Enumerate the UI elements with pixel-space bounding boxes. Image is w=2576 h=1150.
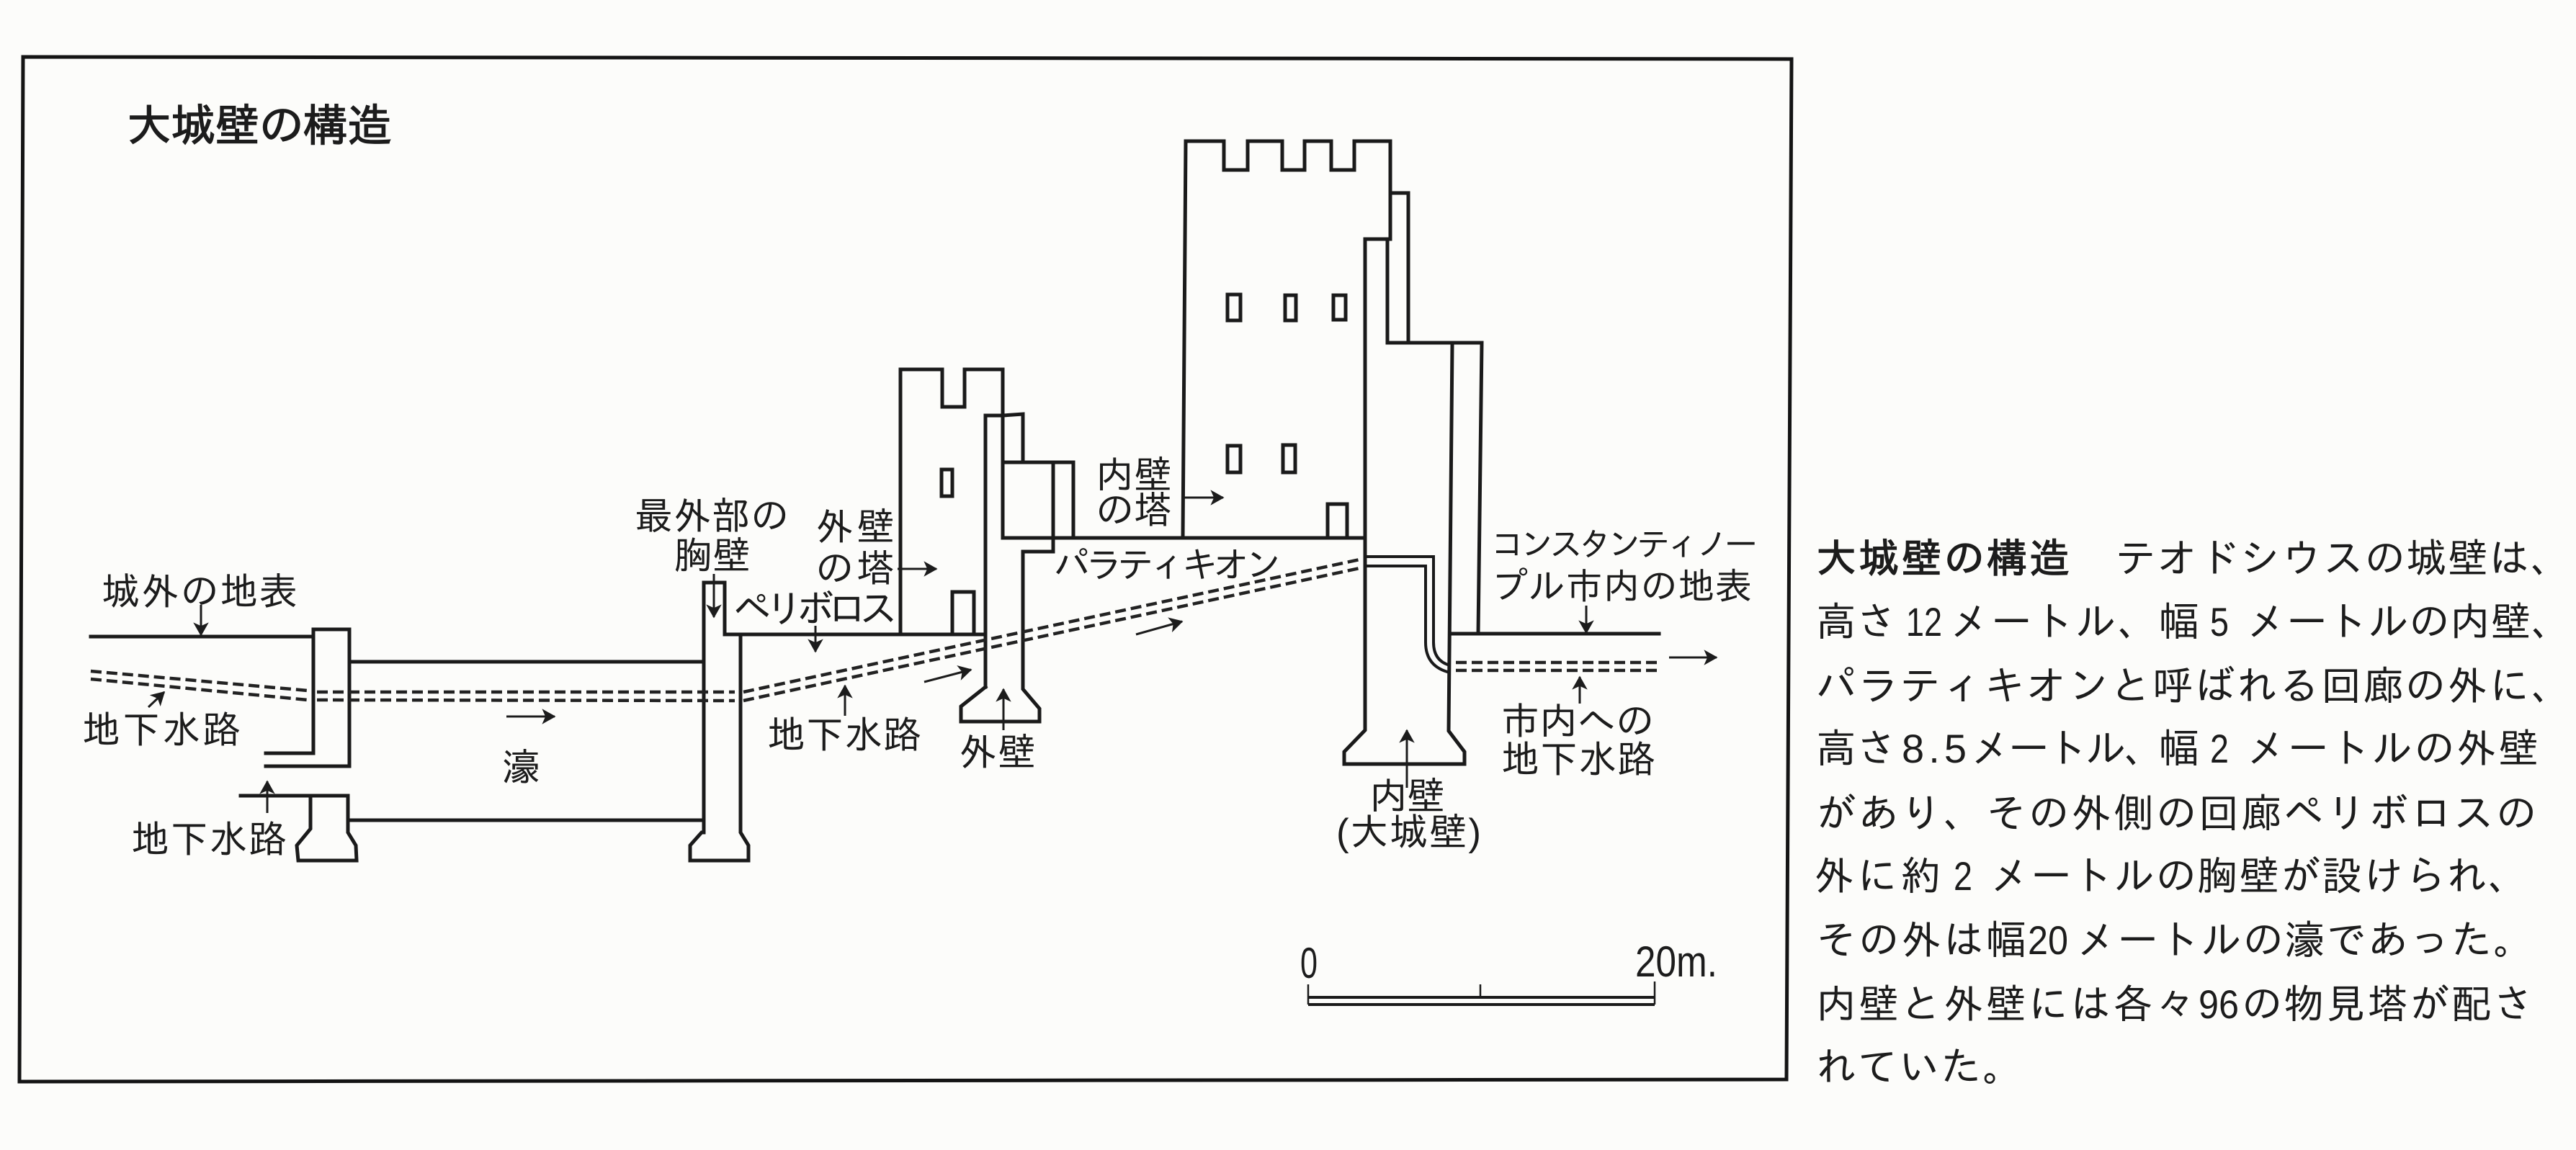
- arrow: conduit exit: [1669, 657, 1717, 658]
- arrow: lower conduit: [267, 781, 268, 813]
- label: inner tower line 1: 内壁: [1096, 454, 1172, 497]
- arrow: outer tower: [898, 567, 936, 570]
- label: outer tower line 2: の塔: [815, 548, 895, 590]
- inner tower windows: [1227, 295, 1346, 472]
- label: city conduit line 2: 地下水路: [1501, 739, 1655, 781]
- label: moat: 濠: [502, 747, 540, 789]
- line 4: [1816, 726, 2539, 771]
- outer tower: [900, 369, 1003, 634]
- line 4: 幅: [2159, 726, 2199, 771]
- label: constantinople line 1: コンスタンティノー: [1491, 526, 1758, 563]
- scale label zero: 0: [1300, 939, 1318, 987]
- outer wall block: [1003, 462, 1073, 538]
- outermost parapet wall: [690, 583, 748, 861]
- outer tower door: [952, 592, 974, 634]
- label: constantinople line 2: プル市内の地表: [1491, 566, 1752, 607]
- outside ground surface: [91, 635, 313, 638]
- panel: diagram frame: [19, 57, 1792, 1082]
- arrow: middle conduit: [844, 686, 846, 716]
- arrow: inner wall: [1406, 730, 1408, 788]
- label: outermost parapet: 最外部の: [635, 495, 789, 538]
- counterscarp wall footing: [241, 796, 357, 861]
- inner tower door: [1328, 504, 1347, 537]
- label: inner wall: 内壁: [1369, 776, 1445, 818]
- arrow: conduit left: [148, 692, 164, 707]
- arrow: city ground: [1585, 606, 1588, 633]
- line 4: 8.5: [1902, 726, 1967, 771]
- periboros ground: [725, 632, 985, 637]
- bold lead-in: 大城壁の構造: [1816, 536, 2070, 581]
- counterscarp wall upper: [266, 629, 349, 766]
- arrow: periboros: [814, 626, 817, 652]
- arrow: moat flow: [506, 716, 555, 717]
- line 8: 96: [2199, 981, 2239, 1027]
- dashed water conduit under moat: [317, 692, 735, 701]
- line 4: メートルの外壁: [2246, 726, 2539, 771]
- line 3: パラティキオンと呼ばれる回廊の外に、: [1816, 663, 2572, 709]
- inner tower: [1183, 141, 1390, 538]
- moat lower line: [349, 818, 702, 822]
- arrow: flow 2: [1136, 621, 1182, 634]
- line 6: 外に約: [1814, 853, 1941, 899]
- dashed water conduit rising: [743, 559, 1363, 701]
- label: periboros: ペリボロス: [733, 588, 898, 631]
- label: great wall: (大城壁): [1336, 812, 1481, 854]
- arrow: city conduit: [1579, 677, 1580, 704]
- label: parapet line 2: 胸壁: [674, 535, 751, 578]
- label: outer wall: 外壁: [959, 732, 1036, 774]
- line 4: 高さ: [1816, 726, 1897, 771]
- line 2: 5: [2210, 599, 2229, 644]
- diagram: wall cross-section: [91, 141, 1659, 861]
- inner wall: [1344, 239, 1464, 764]
- line 9: れていた。: [1816, 1044, 2023, 1090]
- city ground surface: [1452, 632, 1659, 635]
- line 1: テオドシウスの城壁は、: [2116, 536, 2571, 581]
- line 7: [1816, 917, 2533, 963]
- dashed water conduit city: [1456, 662, 1659, 670]
- dashed water conduit outside: [91, 671, 308, 700]
- line 2: 高さ: [1816, 599, 1897, 644]
- arrow: flow 1: [924, 670, 971, 682]
- text block: description: [1814, 536, 2572, 1090]
- line 8: の物見塔が配さ: [2242, 981, 2533, 1027]
- label: inner tower line 2: の塔: [1096, 490, 1172, 532]
- scale bar: [1300, 938, 1717, 1005]
- scale label twenty metres: 20m.: [1635, 938, 1717, 986]
- line 2: [1816, 599, 2572, 644]
- label: conduit middle: 地下水路: [767, 714, 921, 757]
- line 2: メートルの内壁、: [2246, 599, 2572, 644]
- arrow: outer wall: [1003, 689, 1004, 730]
- line 7: メートルの濠であった。: [2076, 917, 2533, 963]
- line 5: があり、その外側の回廊ペリボロスの: [1816, 791, 2536, 836]
- moat upper line: [349, 660, 702, 664]
- title: 大城壁の構造: [127, 102, 392, 151]
- label: conduit lower: 地下水路: [131, 819, 287, 861]
- inner wall upper step: [1387, 193, 1482, 634]
- outer wall: [961, 414, 1053, 722]
- label: city conduit line 1: 市内への: [1501, 701, 1654, 743]
- line 2: 幅: [2159, 599, 2199, 644]
- line 4: メートル、: [1970, 726, 2165, 771]
- arrow: parapet: [713, 574, 715, 617]
- arrow: inner tower: [1183, 497, 1223, 498]
- line 2: 12: [1906, 599, 1942, 644]
- outer tower window: [942, 470, 952, 496]
- line 6: 2: [1954, 853, 1972, 899]
- line 8: [1816, 981, 2533, 1027]
- line 7: 20: [2028, 917, 2068, 963]
- line 4: 2: [2210, 726, 2229, 771]
- label: palatikion: パラティキオン: [1054, 545, 1282, 585]
- label: conduit left: 地下水路: [82, 709, 241, 752]
- line 6: メートルの胸壁が設けられ、: [1990, 853, 2528, 899]
- line 2: メートル、: [1949, 599, 2158, 644]
- arrow: outside ground: [200, 605, 202, 635]
- label: outside ground: 城外の地表: [102, 571, 298, 614]
- line 8: 内壁と外壁には各々: [1816, 981, 2196, 1027]
- line 7: その外は幅: [1816, 917, 2026, 963]
- label: outer tower line 1: 外壁: [815, 506, 895, 549]
- pipe through inner wall: [1365, 557, 1450, 673]
- peribolos and palatikion ground: [1003, 536, 1365, 540]
